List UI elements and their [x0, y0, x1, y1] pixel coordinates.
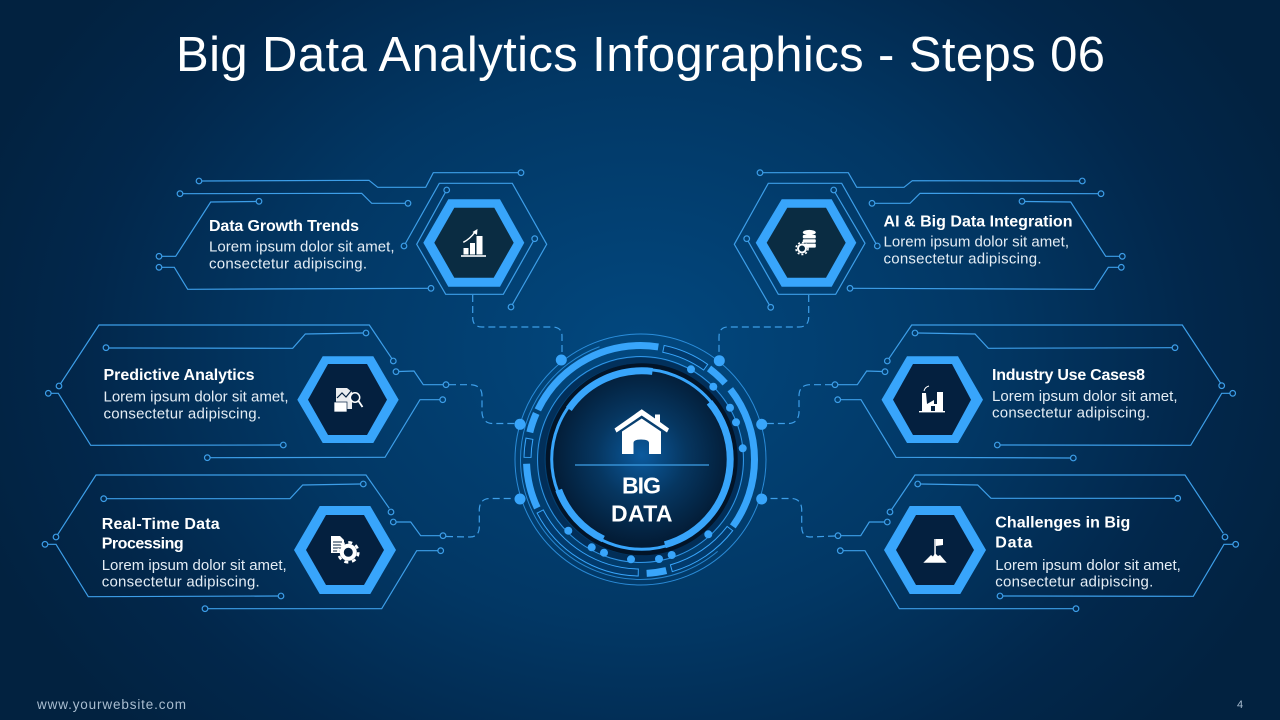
- circuit lines: [42, 475, 446, 612]
- description: Lorem ipsum dolor sit amet,: [995, 557, 1181, 574]
- description: [102, 557, 287, 591]
- icon: flag on mountain: [923, 539, 947, 563]
- description: Lorem ipsum dolor sit amet,: [104, 388, 288, 406]
- circuit lines: [832, 325, 1235, 461]
- hexagon badge: [297, 356, 399, 443]
- circuit lines: [156, 170, 547, 310]
- description: [992, 388, 1178, 422]
- divider: [575, 464, 709, 466]
- description: consectetur adipiscing.: [104, 405, 261, 422]
- heading: Data Growth Trends: [209, 218, 359, 235]
- icon: house: [614, 409, 669, 454]
- description: Lorem ipsum dolor sit amet,: [992, 388, 1178, 405]
- icon: document with gear: [331, 536, 358, 562]
- panel: data growth trends: [156, 170, 562, 356]
- heading: AI & Big Data Integration: [884, 214, 1072, 230]
- heading: Predictive Analytics: [104, 367, 255, 384]
- heading: Industry Use Cases8: [992, 367, 1145, 384]
- icon: growth chart: [461, 229, 486, 257]
- heading: Real-Time Data: [102, 516, 220, 533]
- circuit lines: [835, 475, 1238, 612]
- hexagon badge: [294, 506, 396, 594]
- footer website: www.yourwebsite.com: [36, 697, 186, 712]
- ring nodes: [514, 354, 767, 563]
- description: Lorem ipsum dolor sit amet,: [884, 234, 1069, 251]
- heading: Data: [995, 534, 1032, 551]
- description: consectetur adipiscing.: [884, 250, 1042, 267]
- dashed connector: [766, 498, 835, 537]
- heading: [102, 516, 220, 552]
- page number: 4: [1237, 699, 1243, 711]
- circuit lines: [46, 325, 449, 461]
- heading: [995, 515, 1130, 551]
- hub label: BIG: [622, 472, 661, 498]
- description: Lorem ipsum dolor sit amet,: [102, 557, 287, 574]
- description: consectetur adipiscing.: [992, 405, 1150, 422]
- description: consectetur adipiscing.: [102, 574, 260, 591]
- title: Big Data Analytics Infographics - Steps 06: [176, 28, 1105, 82]
- description: consectetur adipiscing.: [995, 574, 1153, 591]
- panel: predictive analytics: [46, 325, 515, 461]
- heading: Processing: [102, 535, 184, 552]
- description: [884, 234, 1069, 267]
- dashed connector: [449, 385, 515, 424]
- description: consectetur adipiscing.: [209, 255, 367, 272]
- hub label: DATA: [611, 500, 672, 526]
- panel: industry use cases: [766, 325, 1235, 461]
- panel: ai and big data integration: [719, 170, 1125, 356]
- panel: real-time data processing: [42, 475, 515, 612]
- core disc: [546, 363, 738, 555]
- dashed connector: [766, 385, 832, 424]
- central hub: [514, 334, 767, 585]
- icon: factory: [919, 386, 945, 412]
- description: [209, 238, 394, 272]
- hexagon badge: [882, 356, 983, 443]
- dashed connector: [473, 295, 562, 356]
- description: Lorem ipsum dolor sit amet,: [209, 238, 394, 256]
- description: [104, 388, 288, 422]
- hub label: [611, 472, 672, 526]
- circuit lines: [734, 170, 1125, 310]
- hexagon badge: [423, 199, 524, 287]
- hexagon badge: [756, 199, 856, 287]
- outer rings: [515, 334, 766, 585]
- icon: database with gear: [796, 230, 816, 254]
- panel: challenges in big data: [766, 475, 1238, 612]
- icon: report with magnifier: [334, 388, 362, 412]
- dashed connector: [719, 295, 809, 356]
- heading: Challenges in Big: [995, 515, 1130, 532]
- description: [995, 557, 1181, 591]
- inner segmented ring: [552, 369, 732, 549]
- hexagon badge: [884, 506, 986, 594]
- dashed connector: [446, 498, 515, 537]
